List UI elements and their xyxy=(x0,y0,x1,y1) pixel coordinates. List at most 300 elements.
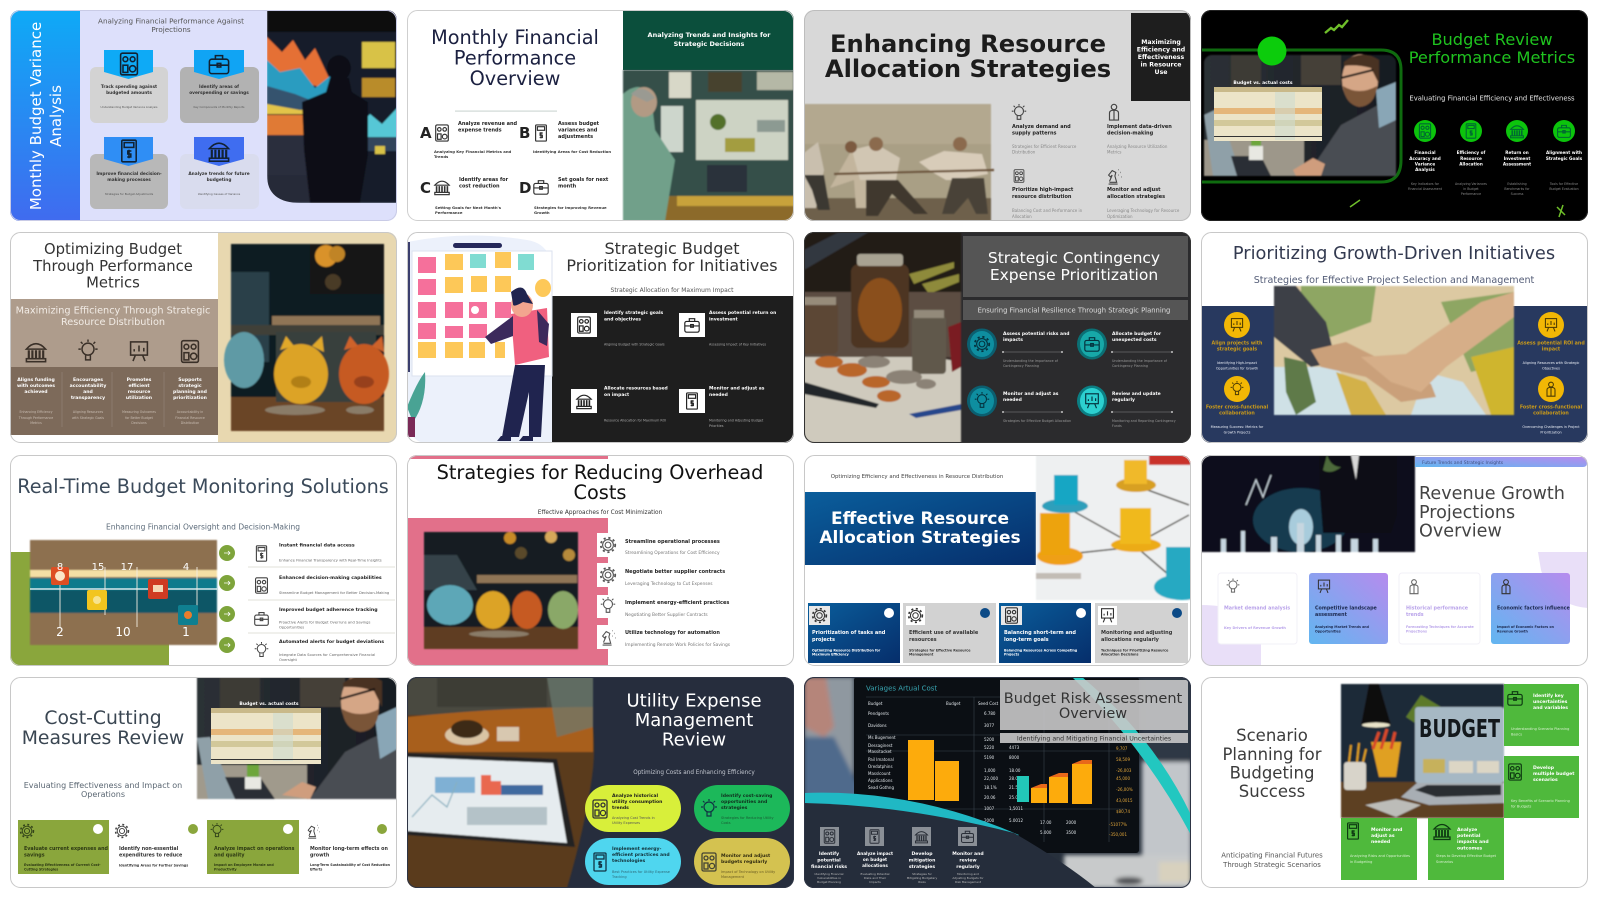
blob: historical consumption: Analyzing Cost Trends in xyxy=(612,816,655,820)
item B: Assess budget xyxy=(558,121,600,127)
title band: Monthly Budget Variance xyxy=(27,22,45,210)
slide: Revenue Growth Projections Overview xyxy=(1201,455,1588,666)
item: assess risks: Contingency Planning xyxy=(1003,364,1039,368)
card: track spending: Track spending against xyxy=(101,84,157,90)
item: automation: Implementing Remote Work Policies for Savings xyxy=(625,642,731,648)
item: instant data: Enhance Financial Transparency with Real-Time Insights xyxy=(279,558,382,562)
title: Projections xyxy=(1419,503,1515,523)
box: multiple scenarios: Key Benefits of Scenario Planning xyxy=(1511,799,1570,803)
blob: historical consumption: trends xyxy=(612,805,629,811)
subtitle: Analyzing Financial Performance Against xyxy=(98,16,244,26)
card: prioritization xyxy=(808,603,900,663)
item: monitor: Monitor and adjust as xyxy=(709,386,765,392)
blob: energy-efficient: Best Practices for Utility Expense xyxy=(612,870,670,874)
photo: financial monitor: 22,000 xyxy=(984,776,998,781)
card: balancing: Balancing short-term and xyxy=(1004,630,1076,636)
item: implement data-driven: decision-making xyxy=(1107,130,1154,136)
card: track spending xyxy=(90,50,168,123)
risk step: monitor: Monitor and xyxy=(952,851,984,857)
item: assess ROI: Aligning Resources with Strategic xyxy=(1523,361,1580,365)
risk step: develop: Risks xyxy=(918,880,926,884)
risk step: identify xyxy=(811,827,847,884)
blob: monitor budgets: budgets regularly xyxy=(721,859,767,865)
subtitle: Optimizing Costs and Enhancing Efficiency xyxy=(633,770,755,776)
item: adherence tracking: Opportunities xyxy=(279,626,304,630)
item: instant data xyxy=(256,542,382,562)
photo: piggy banks xyxy=(424,531,578,649)
item D: month xyxy=(558,184,577,190)
benefit columns: Financial Resource xyxy=(175,416,205,420)
photo: connected pegs xyxy=(1036,455,1210,600)
blob: cost-saving: Identify cost-saving xyxy=(721,793,772,799)
risk step: develop: Develop xyxy=(911,851,933,857)
item A: expense trends xyxy=(458,128,502,134)
slide: Strategic Contingency Expense Prioritization xyxy=(800,232,1191,443)
item: foster collaboration right xyxy=(1520,376,1583,434)
metric: accuracy: Financial xyxy=(1414,150,1436,155)
subtitle panel xyxy=(963,300,1188,320)
metric: efficiency: in Budget xyxy=(1463,187,1479,191)
item C: Setting Goals for Next Month's xyxy=(435,205,502,210)
item: monitor: Strategies for Effective Budget Allocation xyxy=(1003,419,1071,423)
decorative squiggles xyxy=(1325,20,1565,217)
item: assess ROI: Objectives xyxy=(1542,366,1560,370)
photo: financial monitor: Massitacket xyxy=(868,749,892,754)
card: improve decision making: Improve financial decision- xyxy=(96,171,162,177)
benefit columns: strategic xyxy=(178,383,202,389)
card: identify non-essential: expenditures to reduce xyxy=(119,852,183,858)
tan frame xyxy=(218,232,397,443)
title: Strategic Budget xyxy=(605,239,739,258)
risk step: analyze: Evaluating Potential xyxy=(861,872,890,876)
dark subtitle box: Efficiency and xyxy=(1137,46,1185,54)
risk step: monitor: Adjusting Budgets for xyxy=(952,876,984,880)
item: allocate budget: Allocate budget for xyxy=(1112,331,1162,337)
photo: man with laptop xyxy=(197,674,397,799)
photo: financial monitor: 17.00 xyxy=(1040,820,1052,825)
item: strategic goals: and objectives xyxy=(604,316,641,322)
card: prioritization: Prioritization of tasks and xyxy=(812,630,886,636)
teal sweep bottom xyxy=(804,793,1019,837)
card: balancing xyxy=(999,603,1091,663)
card: identify non-essential xyxy=(112,820,204,874)
item: energy: Negotiating Better Supplier Contracts xyxy=(625,612,708,618)
item: assess risks: Understanding the Importance of xyxy=(1003,359,1059,363)
photo: financial monitor: Davidons xyxy=(868,723,887,728)
item: review: Funds xyxy=(1112,424,1122,428)
dark subtitle box: Maximizing xyxy=(1141,39,1181,46)
box: analyze impacts: outcomes xyxy=(1457,846,1482,852)
card: competitive landscape: Analyzing Market Trends and xyxy=(1315,625,1370,629)
timeline photo: 15 xyxy=(92,562,104,573)
title: Performance xyxy=(454,46,576,70)
photo: piggy banks in jars xyxy=(224,244,389,431)
photo: financial monitor: 5.0012 xyxy=(1009,818,1023,823)
subtitle: Evaluating Financial Efficiency and Effectiveness xyxy=(1409,94,1575,102)
title panel: Budget Risk Assessment xyxy=(1004,691,1183,707)
item: monitor: Priorities xyxy=(709,424,724,428)
card: evaluate current: Evaluate current expenses and xyxy=(24,846,109,852)
item: foster collaboration right: Foster cross-functional xyxy=(1520,404,1583,410)
card: identify overspending: Key Components of Monthly Reports xyxy=(194,105,245,109)
slide: Effective Resource Allocation Strategies xyxy=(804,455,1210,666)
photo: budget laptop xyxy=(1341,684,1504,818)
title panel: Overview xyxy=(1059,706,1127,722)
item D xyxy=(519,177,609,215)
metric: accuracy: Financial Assessment xyxy=(1408,187,1443,191)
benefit columns: Enhancing Efficiency xyxy=(19,410,53,414)
metric: return on investment: Return on xyxy=(1505,150,1529,155)
item: energy xyxy=(597,595,729,618)
item: prioritize xyxy=(1012,170,1083,219)
blob: cost-saving: opportunities and xyxy=(721,799,767,805)
item: analyze demand: Distribution xyxy=(1012,150,1036,154)
item A: Analyzing Key Financial Metrics and xyxy=(434,149,512,154)
box: key uncertainties: Identify key xyxy=(1533,693,1564,699)
card: analyze impact: and quality xyxy=(214,852,245,858)
photo: financial monitor: 5.000 xyxy=(1040,830,1052,835)
metric: efficiency: Performance xyxy=(1461,192,1481,196)
subtitle: Optimizing Efficiency and Effectiveness in Resource Distribution xyxy=(831,474,1003,480)
item: decision-making xyxy=(256,575,389,595)
card: historical performance: Historical performance xyxy=(1406,606,1469,612)
benefit columns: Measuring Outcomes xyxy=(122,410,156,414)
blob: monitor budgets: Impact of Technology on Utility xyxy=(721,870,775,874)
card: identify overspending xyxy=(180,50,259,123)
title: Costs xyxy=(574,481,626,504)
photo: financial monitor: 3077 xyxy=(984,723,995,728)
risk step: identify: Identify xyxy=(819,851,839,857)
item A xyxy=(420,121,518,159)
metric: return on investment: Investment xyxy=(1504,156,1530,161)
box: analyze impacts: potential xyxy=(1457,833,1481,839)
card: track spending: budgeted amounts xyxy=(106,90,152,96)
slide: Monthly Financial Performance Overview xyxy=(407,10,794,221)
item: align projects xyxy=(1212,312,1263,370)
item: allocate budget: unexpected costs xyxy=(1112,337,1157,343)
photo: financial monitor: Budget xyxy=(868,701,883,706)
item: negotiate: Negotiate better supplier contracts xyxy=(625,569,725,575)
risk step: develop: mitigation xyxy=(909,858,935,864)
item: strategic goals: Identify strategic goals xyxy=(604,310,663,316)
slide: Cost-Cutting Measures Review xyxy=(10,674,397,888)
title: Optimizing Budget xyxy=(44,241,182,258)
photo: financial monitor: 45,000 xyxy=(1116,776,1130,781)
blue title panel xyxy=(804,492,1036,565)
item: alerts: Automated alerts for budget deviations xyxy=(279,639,384,645)
item C xyxy=(420,177,509,215)
photo: financial monitor: -26,00% xyxy=(1116,787,1133,792)
item D: D xyxy=(519,179,531,197)
box: monitor: in Budgeting xyxy=(1350,860,1372,864)
item: return on investment: Assessing Impact of Key Initiatives xyxy=(709,342,766,346)
metric: alignment: Tools for Effective xyxy=(1549,182,1578,186)
benefit columns: Promotes xyxy=(127,377,152,383)
dividers xyxy=(248,567,395,633)
item: review xyxy=(1077,386,1176,428)
card: identify overspending: Identify areas of xyxy=(199,84,239,90)
benefit columns: achieved xyxy=(24,389,48,395)
item: analyze demand: Strategies for Efficient Resource xyxy=(1012,144,1077,149)
item: strategic goals xyxy=(571,310,665,346)
item: streamline: Streamline operational processes xyxy=(625,539,720,545)
blue title panel: Allocation Strategies xyxy=(819,528,1021,548)
blob: historical consumption xyxy=(585,785,681,832)
item: implement data-driven: Implement data-driven xyxy=(1107,124,1172,130)
photo: financial monitor: 6.780 xyxy=(984,711,996,716)
metric: alignment: Strategic Goals xyxy=(1546,156,1583,161)
item: assess risks xyxy=(967,328,1070,368)
item: prioritize: Balancing Cost and Performance in xyxy=(1012,208,1083,213)
green header: Strategic Decisions xyxy=(674,40,745,48)
photo: financial monitor: Dessaginest xyxy=(868,743,893,748)
illustration: person at sticky board xyxy=(407,235,552,443)
card: analyze trends: Identifying Causes of Variance xyxy=(198,192,240,196)
slide: Strategic Budget Prioritization for Initiatives xyxy=(407,232,794,443)
card: monitor long-term xyxy=(302,820,394,874)
benefit columns: efficient xyxy=(128,383,150,389)
subtitle: Effective Approaches for Cost Minimization xyxy=(538,510,663,516)
item: assess ROI: Assess potential ROI and xyxy=(1517,340,1585,346)
box: multiple scenarios: scenarios xyxy=(1533,777,1558,783)
title: Success xyxy=(1239,782,1305,801)
item: monitor: needed xyxy=(1003,397,1022,403)
title: Strategies for Reducing Overhead xyxy=(437,461,763,484)
benefit columns: with outcomes xyxy=(17,383,55,389)
benefit columns: accountability xyxy=(70,383,106,389)
item: foster collaboration left: Growth Projects xyxy=(1224,430,1251,434)
item: adherence tracking xyxy=(255,607,378,630)
card: economic factors: Economic factors influence xyxy=(1497,606,1570,612)
photo: financial monitor: 20.06 xyxy=(984,795,996,800)
photo: financial monitor: 18.1% xyxy=(984,785,997,790)
card: economic factors: Impact of Economic Factors on xyxy=(1497,625,1555,629)
item: allocate budget: Contingency Planning xyxy=(1112,364,1148,368)
card: prioritization: projects xyxy=(812,637,835,643)
item: foster collaboration right: Overcoming Challenges in Project xyxy=(1522,425,1580,429)
slide: Real-Time Budget Monitoring Solutions xyxy=(10,455,397,666)
item: analyze demand xyxy=(1012,104,1077,154)
photo: analyst at whiteboard xyxy=(623,70,794,221)
metric: efficiency: Analyzing Variances xyxy=(1455,182,1487,186)
item: streamline xyxy=(597,533,720,557)
photo: financial monitor: Oredatphins xyxy=(868,764,893,769)
card: evaluate current: Evaluating Effectiveness of Current Cost- xyxy=(24,863,101,867)
timeline photo: 8 xyxy=(57,562,63,573)
item: assess ROI xyxy=(1517,312,1585,370)
accent circle xyxy=(1258,36,1286,66)
item A: A xyxy=(420,124,432,142)
risk step: identify: financial risks xyxy=(811,864,847,870)
lilac decorations xyxy=(1201,552,1588,666)
subtitle panel: Ensuring Financial Resilience Through Strategic Planning xyxy=(978,306,1170,314)
metric: return on investment: Benchmarks for xyxy=(1504,187,1530,191)
photo: financial monitor: 5220 xyxy=(984,745,995,750)
card: improve decision making: Strategies for Budget Adjustments xyxy=(105,192,154,196)
card: historical performance: Forecasting Techniques for Accurate xyxy=(1406,625,1475,629)
benefit columns: Aligning Resources xyxy=(73,410,103,414)
timeline photo: 17 xyxy=(121,562,133,573)
card: analyze trends: budgeting xyxy=(207,177,231,183)
subtitle panel: Identifying and Mitigating Financial Uncertainties xyxy=(1017,736,1171,742)
card: analyze impact: Impact on Employee Morale and xyxy=(214,863,274,867)
risk step: develop: Strategies for xyxy=(912,872,933,876)
metric: alignment: Budget Evaluation xyxy=(1549,187,1579,191)
blob: cost-saving: Strategies for Reducing Utility xyxy=(721,816,774,820)
metric: return on investment: Assessment xyxy=(1503,162,1531,166)
photo frame and photo xyxy=(1201,50,1401,182)
item: monitor xyxy=(967,386,1071,423)
cost table: Budget vs. actual costs xyxy=(1233,80,1293,86)
metric: accuracy: Accuracy and xyxy=(1409,156,1441,161)
photo: financial monitor: 8000 xyxy=(1009,755,1020,760)
item D: Set goals for next xyxy=(558,177,609,183)
photo: financial monitor: 25.0% xyxy=(1009,795,1022,800)
item: review: regularly xyxy=(1112,397,1135,403)
timeline photo: 2 xyxy=(56,625,64,639)
green header xyxy=(623,10,794,70)
card: efficient use: Strategies for Effective Resource xyxy=(909,648,971,652)
benefit columns: Decisions xyxy=(131,421,147,425)
photo: financial monitor: 18.00 xyxy=(1009,768,1021,773)
subtitle: Strategic Allocation for Maximum Impact xyxy=(611,287,734,294)
box: key uncertainties: Understanding Scenario Planning xyxy=(1511,727,1569,731)
item: foster collaboration left: collaboration xyxy=(1219,410,1255,416)
photo: financial monitor: Masslcount xyxy=(868,771,891,776)
item: alerts: Oversight xyxy=(279,658,297,662)
slide: Monthly Budget Variance Analysis xyxy=(10,10,397,221)
subtitle panel: Resource Distribution xyxy=(61,317,165,328)
blob: energy-efficient: technologies xyxy=(612,858,645,864)
item: instant data: Instant financial data access xyxy=(279,542,355,548)
metric: efficiency: Resource xyxy=(1460,156,1482,161)
item: monitor: Optimization xyxy=(1107,214,1133,219)
cost table xyxy=(1214,80,1322,141)
benefit columns: planning and xyxy=(173,389,207,395)
item: energy: Implement energy-efficient practices xyxy=(625,600,729,606)
item B: B xyxy=(519,124,530,142)
card: monitoring: Allocation Decisions xyxy=(1101,652,1138,656)
blob: energy-efficient: Tracking xyxy=(611,875,627,879)
arrow buttons xyxy=(219,545,235,653)
item: implement data-driven: Metrics xyxy=(1107,150,1122,154)
blob: energy-efficient: Implement energy- xyxy=(612,846,661,852)
title panel: Strategic Contingency xyxy=(988,249,1160,267)
item D: Growth xyxy=(534,210,550,215)
subtitle: Projections xyxy=(151,25,191,34)
blob: cost-saving: Costs xyxy=(721,821,731,825)
title: Utility Expense xyxy=(626,690,762,712)
risk step: analyze: Impacts xyxy=(869,880,881,884)
metric: alignment xyxy=(1546,120,1583,191)
slide: Prioritizing Growth-Driven Initiatives xyxy=(1201,232,1588,443)
risk step: identify: potential xyxy=(817,858,841,864)
metric: accuracy xyxy=(1408,120,1443,191)
item C: Identify areas for xyxy=(459,177,509,183)
benefit columns: Supports xyxy=(178,377,202,383)
photo: financial monitor: -350,001 xyxy=(1109,832,1127,837)
title: Scenario xyxy=(1236,726,1308,745)
subtitle: Through Strategic Scenarios xyxy=(1222,861,1321,869)
card: monitoring: allocations regularly xyxy=(1101,637,1160,643)
photo: financial monitor: 43,0015 xyxy=(1116,798,1133,803)
card: efficient use: Management xyxy=(909,652,934,656)
photo: handshake on map xyxy=(1274,286,1514,415)
box: key uncertainties: uncertainties xyxy=(1533,699,1568,705)
box: monitor: needed xyxy=(1371,839,1390,845)
benefit columns: for Better Budget xyxy=(125,416,154,420)
risk step: analyze: allocations xyxy=(862,863,888,868)
metric: accuracy: Variance xyxy=(1415,162,1435,166)
photo: financial monitor: 1007 xyxy=(984,806,995,811)
box: multiple scenarios xyxy=(1504,756,1579,818)
item: alerts: Integrate Data Sources for Comprehensive Financial xyxy=(279,653,375,657)
photo: financial monitor: Sead Gothng xyxy=(868,785,894,790)
benefit columns: Distribution xyxy=(181,421,199,425)
pink top strip xyxy=(407,455,608,459)
risk step: analyze: on budget xyxy=(863,857,887,862)
box: multiple scenarios: Develop xyxy=(1533,765,1555,771)
item: allocate resources xyxy=(571,386,668,422)
subtitle panel: Maximizing Efficiency Through Strategic xyxy=(16,306,210,316)
photo: financial monitor: 5190 xyxy=(984,755,995,760)
item: monitor: Monitoring and Adjusting Budget xyxy=(709,418,764,422)
card: improve decision making: making processes xyxy=(107,177,151,183)
item: analyze demand: supply patterns xyxy=(1012,130,1057,136)
item: foster collaboration left: Measuring Success: Metrics for xyxy=(1211,425,1264,429)
item: align projects: strategic goals xyxy=(1217,346,1257,352)
slide: Enhancing Resource Allocation Strategies xyxy=(804,10,1191,221)
item B: variances and xyxy=(558,128,598,134)
box: monitor: Analyzing Risks and Opportunities xyxy=(1350,854,1410,858)
photo: financial monitor: 1,000 xyxy=(984,768,996,773)
metric: efficiency xyxy=(1455,120,1487,196)
subtitle: Evaluating Effectiveness and Impact on xyxy=(24,781,182,790)
benefit columns: Aligns funding xyxy=(17,377,55,383)
item: monitor: Leveraging Technology for Resource xyxy=(1107,208,1180,213)
metric: efficiency: Allocation xyxy=(1459,162,1483,166)
risk step: monitor: Monitoring and xyxy=(957,872,979,876)
box: analyze impacts: Analyze xyxy=(1457,827,1477,833)
dark subtitle box xyxy=(1131,13,1191,101)
timeline photo: 10 xyxy=(115,625,131,639)
pink panel xyxy=(407,518,608,666)
title: Revenue Growth xyxy=(1419,484,1565,504)
subtitle: Anticipating Financial Futures xyxy=(1221,852,1323,860)
subtitle panel xyxy=(10,299,218,367)
item: monitor: Monitor and adjust as xyxy=(1003,391,1059,397)
benefit columns: utilization xyxy=(126,395,152,401)
card: analyze trends xyxy=(180,137,259,209)
blob: monitor budgets: Management xyxy=(721,875,745,879)
card: market demand xyxy=(1218,573,1297,644)
timeline photo: 1 xyxy=(182,625,190,639)
navy panel xyxy=(1201,306,1588,443)
title: Prioritizing Growth-Driven Initiatives xyxy=(1233,243,1555,264)
item: foster collaboration right: collaboration xyxy=(1533,410,1569,416)
box: key uncertainties: Basics xyxy=(1511,732,1522,736)
photo: tug of war xyxy=(804,104,994,221)
box: analyze impacts: impacts and xyxy=(1457,839,1489,845)
risk step: monitor: review xyxy=(959,858,977,864)
title: Performance Metrics xyxy=(1409,48,1575,67)
tag bar: Future Trends and Strategic Insights xyxy=(1422,460,1504,466)
card: historical performance xyxy=(1399,573,1480,644)
card: identify non-essential: Identify non-essential xyxy=(119,846,179,852)
item: allocate budget: Understanding the Importance of xyxy=(1112,359,1168,363)
photo: financial monitor: 21.5% xyxy=(1009,785,1022,790)
title panel xyxy=(1000,680,1188,730)
